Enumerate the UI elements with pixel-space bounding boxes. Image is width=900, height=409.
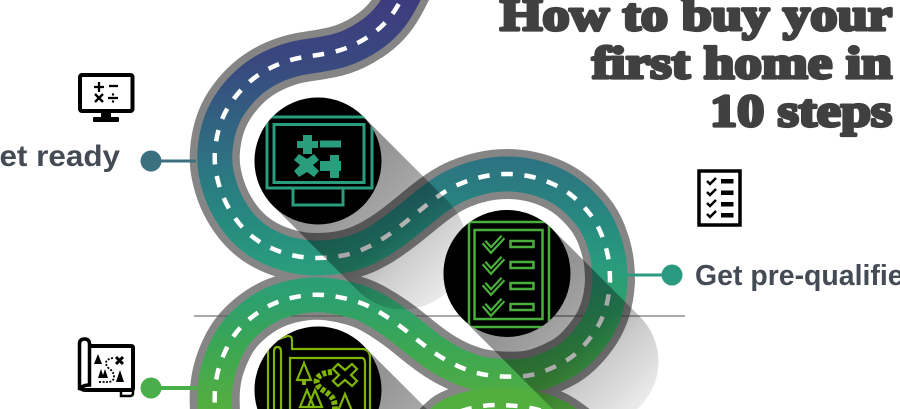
title [500,0,892,136]
icon: treasure map in black circle [254,326,382,409]
icon: black monitor [80,75,132,122]
title: 10 steps [710,85,892,136]
icon: checklist in black circle [444,210,570,337]
winding road [194,0,685,409]
icon: black map [80,339,133,396]
title: first home in [592,37,892,88]
connector: get ready [140,150,196,172]
connector: map step [140,378,197,398]
long shadows [318,161,595,409]
connector: get pre-qualified [627,264,682,286]
icon: black checklist [699,171,740,225]
icon: calculator monitor in black circle [254,98,382,224]
